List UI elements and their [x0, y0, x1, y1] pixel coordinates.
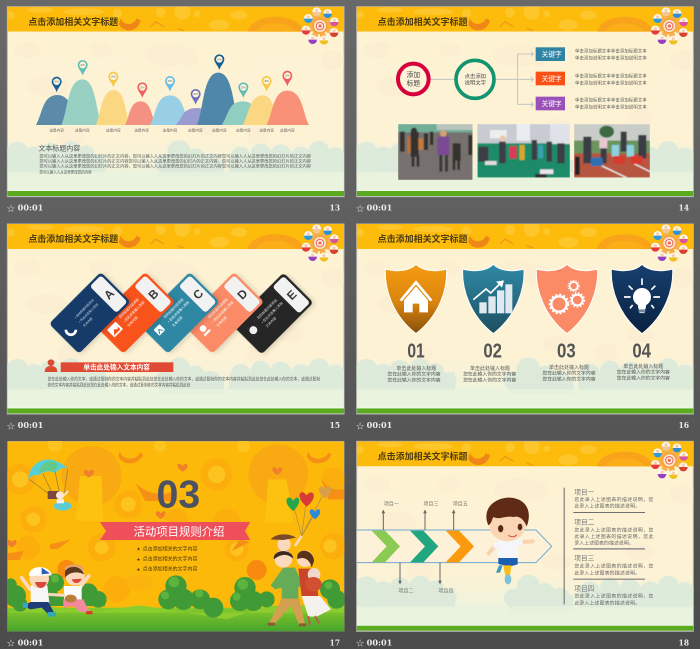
card D: 文本内容	[215, 314, 228, 328]
slide footer: ☆	[356, 204, 365, 215]
shield 03 with gears icon	[536, 264, 598, 334]
icon: header badge	[302, 7, 339, 45]
number 03: 03	[156, 473, 200, 517]
item list: 您此录入上述图表的描述说明，您	[574, 496, 653, 503]
shield captions: 您在此输入你的文字内容	[387, 370, 441, 377]
title ribbon: 活动项目规则介绍	[134, 525, 224, 539]
card D: • 在此点击输入添加	[211, 299, 235, 324]
card B: 您的标题内容添加	[117, 297, 140, 319]
bullet list: ★	[137, 546, 141, 551]
shield captions: 单击此处输入标题	[623, 363, 663, 370]
slide footer: 18	[679, 637, 689, 647]
title ribbon	[100, 522, 250, 540]
background illustration	[4, 437, 347, 631]
item list: 您此录入上述图表的描述说明，您	[574, 526, 653, 533]
item list	[573, 488, 653, 606]
panel: slide 16 four shields	[355, 221, 697, 432]
timeline labels	[384, 501, 468, 594]
shield captions: 您在此输入你的文字内容	[542, 370, 596, 377]
keyword descriptions: 单击添加标题文本单击添加标题文本	[575, 72, 647, 79]
card B: B	[145, 286, 162, 302]
shield captions: 您在此输入你的文字内容	[617, 375, 670, 382]
title: 点击添加相关文字标题	[378, 233, 468, 244]
slide footer: 13	[330, 203, 340, 213]
slide footer: 00:01	[367, 638, 392, 648]
subheading bar: 单击此处输入文本内容	[83, 362, 150, 371]
icon: header badge	[302, 224, 339, 262]
card C	[138, 272, 220, 354]
slide footer: 00:01	[18, 638, 43, 648]
card B: 文本内容	[126, 314, 139, 328]
card A: • 在此点击输入添加	[77, 302, 99, 324]
timeline labels: 项目五	[453, 501, 468, 507]
slide footer: 00:01	[367, 204, 392, 214]
icon: header badge	[651, 442, 688, 479]
paragraph: 您在此处输入你的文本，或通过复制你的文本内容并粘贴到此处您在此处输入你的文本，或通过复制你的文本内容并粘贴到此处您在此处输入你的文本，或通过复制	[48, 376, 321, 383]
slide footer	[6, 420, 340, 432]
bell curve chart: 这是内容	[49, 127, 64, 132]
title: 点击添加相关文字标题	[28, 233, 118, 244]
bell curve chart: 30%	[111, 77, 116, 79]
photo: children on green field	[477, 124, 570, 178]
panel: slide 17 section cover	[4, 437, 347, 649]
text block	[38, 143, 311, 175]
bell curve chart: 30%	[217, 59, 222, 61]
slide footer: 16	[679, 420, 689, 430]
slide footer	[6, 637, 340, 649]
bullet list: 点击添加相关的文字内容	[143, 566, 198, 573]
bell curve chart: 30%	[80, 65, 85, 67]
bullet list: ★	[137, 556, 141, 561]
numbers: 02	[483, 340, 502, 362]
slide footer: ☆	[6, 421, 15, 432]
bushes	[4, 574, 346, 618]
bell curve chart: 这是内容	[163, 127, 178, 132]
panel: slide 14 flow diagram and photos	[355, 4, 697, 215]
keyword boxes	[536, 47, 565, 110]
timeline markers	[382, 511, 455, 583]
timeline labels: 项目三	[424, 501, 438, 507]
item list: 此录入上述图表的描述说明。	[574, 503, 640, 510]
slide footer: 15	[330, 420, 340, 430]
shield captions: 单击此处输入标题	[396, 365, 436, 372]
card A: • 您的标题内容添加	[73, 298, 95, 319]
bell curve chart: 30%	[168, 81, 172, 83]
bell curve chart: 这是内容	[106, 127, 121, 132]
keyword descriptions: 单击添加标题文本单击添加标题文本	[575, 47, 647, 54]
circle: add title: 标题	[407, 78, 420, 87]
item list: 项目一	[574, 488, 595, 496]
keyword descriptions: 单击添加说明文本单击添加说明文本	[575, 55, 647, 62]
vertical divider	[564, 488, 565, 604]
card E	[232, 273, 313, 354]
bell curve chart: 30%	[241, 87, 246, 89]
slide footer	[356, 637, 689, 649]
card C: C	[190, 286, 206, 302]
shield captions: 您在此输入你的文字内容	[463, 370, 516, 377]
item list: 此录入上述图表的描述说明。	[574, 569, 640, 576]
item list: 您此录入上述图表的描述说明，您	[574, 593, 653, 600]
illustration: boy	[486, 498, 533, 584]
card C: • 在此点击输入添加	[166, 299, 191, 324]
bell curve chart: 30%	[285, 76, 290, 78]
photo: crowd on playground	[398, 124, 473, 180]
card A: 文本内容	[82, 316, 94, 328]
shield captions	[387, 363, 670, 383]
slide footer: 00:01	[18, 204, 43, 214]
slide footer: ☆	[356, 421, 365, 432]
card C: 文本内容	[171, 314, 184, 328]
slide footer: 00:01	[18, 421, 43, 431]
item list: 项目三	[574, 555, 595, 563]
bell curve chart: 这是内容	[280, 127, 295, 132]
slide footer: 14	[679, 203, 689, 213]
shield captions: 您在此输入你的文字内容	[542, 376, 596, 383]
text block: 您可以输入人从这里更改您的幻灯片的正文内容，您可以输入人从这里更改您的幻灯片的正文内容您可以输入人从这里更改您的幻灯片的正文内容	[39, 152, 311, 158]
bullet list: ★	[137, 566, 141, 571]
keyword descriptions: 单击添加说明文本单击添加说明文本	[575, 104, 647, 111]
shield 02 with growth chart icon	[463, 264, 524, 334]
illustration: running children	[22, 566, 93, 617]
title: 点击添加相关文字标题	[378, 16, 468, 27]
keyword boxes: 关键字	[542, 50, 562, 59]
timeline labels: 项目四	[439, 588, 453, 594]
numbers: 01	[407, 340, 425, 362]
arrow band	[357, 530, 552, 563]
keyword boxes: 关键字	[542, 74, 562, 83]
bell curve chart	[36, 54, 309, 132]
numbers	[407, 340, 651, 362]
keyword descriptions	[575, 47, 647, 111]
icon: header badge	[651, 224, 688, 262]
item list: 此录入上述图表的描述说明，您此	[574, 533, 653, 540]
slide footer: ☆	[6, 204, 15, 215]
panel: slide 15 diagonal cards	[6, 221, 347, 432]
slide footer	[356, 203, 689, 215]
illustration: parachute	[28, 459, 72, 511]
item list: 您此录入上述图表的描述说明，您	[574, 563, 653, 570]
slide footer	[356, 420, 689, 432]
panel: slide 13 bell curve chart	[6, 4, 347, 215]
card B: • 在此点击输入添加	[122, 299, 146, 324]
bullet list: 点击添加相关的文字内容	[143, 545, 198, 552]
keyword boxes: 关键字	[542, 99, 562, 108]
bell curve chart: 这是内容	[259, 127, 274, 132]
card B	[93, 272, 175, 354]
shield captions: 您在此输入你的文字内容	[463, 376, 516, 383]
numbers: 04	[632, 340, 651, 362]
grass	[7, 608, 344, 631]
circle: add title	[398, 64, 429, 94]
keyword descriptions: 单击添加说明文本单击添加说明文本	[575, 80, 647, 87]
chevrons	[372, 531, 474, 562]
circle: add title: 添加	[407, 70, 420, 79]
numbers: 03	[557, 340, 576, 362]
slide footer: 00:01	[367, 421, 392, 431]
shield captions: 您在此输入你的文字内容	[387, 376, 441, 383]
item list: 此录入上述图表的描述说明。	[574, 599, 640, 606]
text block: 您可以输入人从这里更改您的内容	[39, 169, 92, 175]
bullet list: 点击添加相关的文字内容	[143, 556, 198, 563]
card C: 您的标题内容添加	[162, 297, 185, 319]
photo: children racing on track	[574, 124, 650, 178]
bell curve chart: 这是内容	[212, 127, 227, 132]
paragraph	[48, 376, 321, 388]
subheading bar	[61, 362, 173, 372]
bell curve chart: 30%	[264, 81, 269, 83]
shield captions: 您在此输入你的文字内容	[617, 369, 670, 376]
bell curve chart: 30%	[140, 87, 145, 89]
bullet list	[137, 545, 198, 573]
card E: • 在此点击输入添加	[260, 300, 284, 324]
circle: description: 说明文字	[465, 79, 486, 87]
card D: 您的标题内容添加	[206, 297, 229, 319]
bell curve chart: 这是内容	[75, 127, 90, 132]
item list: 项目二	[574, 518, 595, 526]
circle: description	[456, 60, 494, 98]
icon: header badge	[651, 7, 688, 45]
illustration: family with balloons	[268, 486, 331, 626]
card D: D	[234, 286, 251, 302]
connector arrows	[431, 52, 533, 107]
title: 点击添加相关文字标题	[28, 16, 118, 27]
panel: slide 18 chevron timeline	[355, 438, 697, 649]
slide footer: 17	[330, 637, 340, 647]
icon: person	[45, 359, 57, 372]
timeline labels: 项目二	[399, 588, 413, 594]
title: 点击添加相关文字标题	[378, 451, 468, 462]
bell curve chart: 这是内容	[188, 127, 203, 132]
card D	[182, 272, 264, 354]
timeline labels: 项目一	[384, 501, 399, 507]
card E: 您的标题内容添加	[256, 297, 279, 320]
card E: 文本内容	[264, 315, 278, 329]
shield 04 with light bulb icon	[611, 264, 673, 334]
text block: 您可以输入人从这里更改您的幻灯片的正文内容，您可以输入人从这里更改您的幻灯片的正文内容您可以输入人从这里更改您的幻灯片的正文内容	[39, 163, 311, 169]
item list: 项目四	[574, 585, 595, 593]
slide footer	[6, 203, 340, 215]
paragraph: 你的文本内容并粘贴到此处您在此处输入你的文本，或通过复制你的文本内容并粘贴到此处	[48, 381, 191, 388]
bell curve chart: 这是内容	[134, 127, 149, 132]
bell curve chart: 这是内容	[236, 127, 251, 132]
shield captions: 单击此处输入标题	[549, 364, 589, 371]
item list: 录入上述图表的描述说明。	[574, 540, 634, 547]
card A	[49, 272, 131, 354]
shield captions: 单击此处输入标题	[470, 365, 510, 372]
shield 01 with house icon	[385, 264, 447, 334]
circle: description: 点击添加	[465, 72, 486, 80]
bell curve chart: 30%	[193, 94, 198, 96]
text block: 文本标题内容	[38, 143, 80, 152]
text block: 您可以输入人从这里更改您的幻灯片的正文内容您可以输入人从这里更改您的幻灯片的正文内容，您可以输入人从这里更改您的幻灯片的正文内容	[39, 157, 311, 163]
card A: A	[101, 286, 117, 302]
keyword descriptions: 单击添加标题文本单击添加标题文本	[575, 96, 647, 103]
card E: E	[284, 287, 300, 303]
bell curve chart: 30%	[54, 82, 59, 84]
